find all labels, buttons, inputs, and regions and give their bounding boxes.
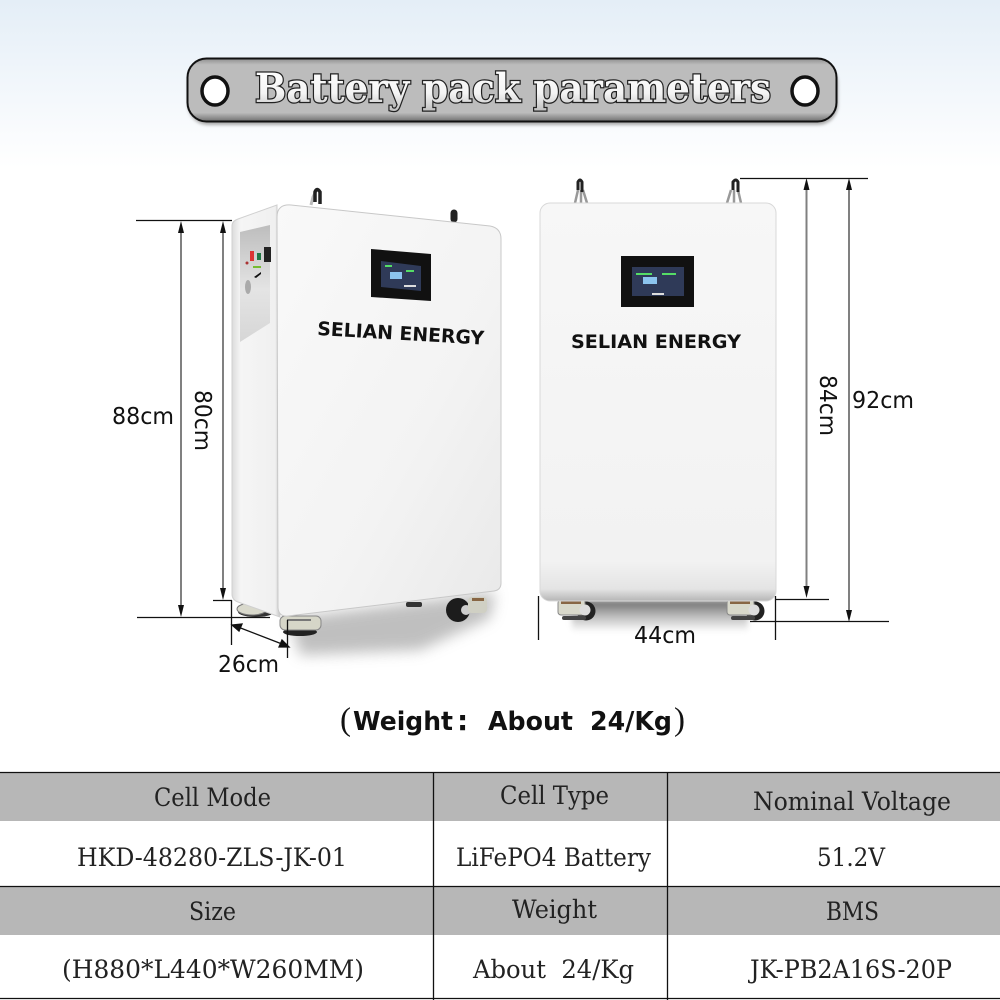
left battery, angled view — [232, 189, 501, 655]
brand logo: SELIAN ENERGY — [317, 318, 485, 350]
cell: size value: (H880*L440*W260MM) — [62, 955, 364, 985]
handles — [311, 189, 454, 219]
battery side face — [232, 205, 280, 617]
right dimension lines — [538, 178, 889, 640]
cell: Cell Type: Cell Type — [500, 781, 609, 811]
cell: BMS value: JK-PB2A16S-20P — [747, 955, 952, 985]
arrow: 26cm depth — [232, 624, 289, 647]
side connector recess — [240, 225, 271, 342]
cell: voltage value: 51.2V — [817, 843, 886, 873]
battery front face — [277, 205, 501, 616]
cell: Weight: Weight — [512, 895, 598, 925]
weight caption: ) — [674, 702, 685, 738]
arrow: 88cm height — [178, 221, 184, 617]
left wheel — [558, 600, 596, 620]
cell: Size: Size — [189, 897, 236, 927]
title banner — [188, 58, 838, 125]
display screen — [371, 249, 431, 301]
left dimension lines — [136, 220, 289, 658]
weight caption: : — [457, 704, 468, 737]
arrow: 92cm height — [846, 178, 852, 622]
weight caption: 24/Kg — [590, 707, 672, 737]
rear left foot — [237, 603, 274, 617]
label: 84cm: 84cm — [814, 375, 840, 436]
right battery, front view — [540, 180, 776, 632]
rear right wheel — [406, 597, 487, 622]
front foot — [280, 616, 321, 636]
label: 80cm: 80cm — [189, 390, 215, 451]
left handle — [575, 180, 587, 203]
cell: weight value: About 24/Kg — [472, 955, 634, 985]
header row shading 2 — [0, 887, 1000, 935]
cell: Cell Mode: Cell Mode — [154, 783, 271, 813]
cell: BMS: BMS — [826, 897, 879, 927]
display screen — [621, 256, 694, 307]
cell: Nominal Voltage: Nominal Voltage — [753, 787, 951, 817]
table grid — [0, 772, 1000, 1000]
weight caption: ( — [340, 702, 351, 738]
label: 88cm: 88cm — [112, 404, 174, 430]
right wheel — [727, 600, 764, 620]
specification table — [0, 772, 1000, 1000]
cell: cell type value: LiFePO4 Battery — [456, 843, 652, 873]
header row shading 1 — [0, 773, 1000, 821]
icon: right banner hole — [792, 77, 818, 105]
brand logo: SELIAN ENERGY — [571, 331, 741, 353]
page background — [0, 0, 1000, 168]
weight caption — [340, 702, 685, 738]
weight caption: About — [488, 707, 573, 737]
icon: left banner hole — [202, 77, 228, 105]
right handle — [727, 180, 741, 203]
arrow: 84cm height — [804, 178, 810, 598]
cell: model value: HKD-48280-ZLS-JK-01 — [77, 843, 347, 873]
weight caption: Weight — [353, 707, 453, 737]
battery front face — [540, 203, 776, 601]
arrow: 80cm height — [220, 221, 226, 600]
label: 92cm: 92cm — [852, 388, 914, 414]
label: 44cm: 44cm — [634, 623, 696, 649]
label: 26cm: 26cm — [218, 652, 279, 678]
title text: Battery pack parameters — [255, 65, 771, 112]
